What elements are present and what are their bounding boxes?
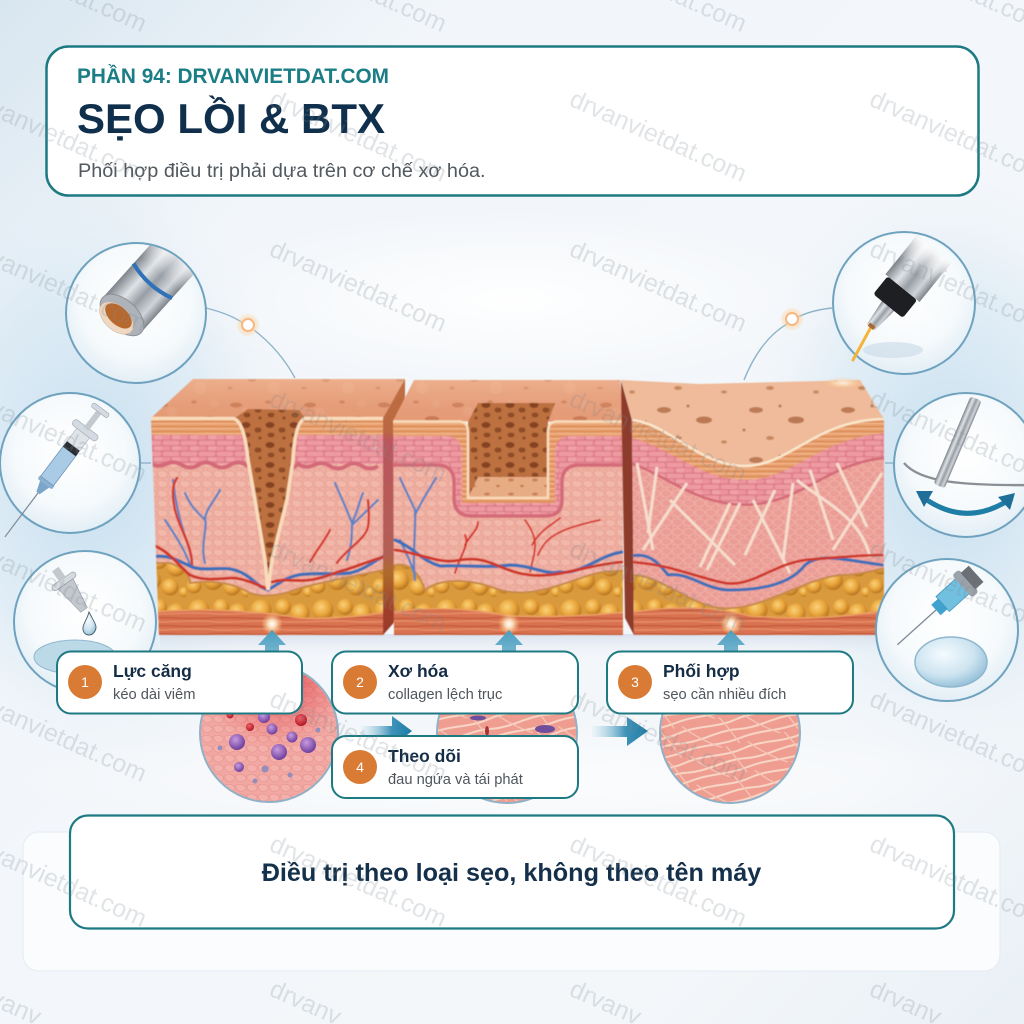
tool circle: microneedle handpiece	[66, 229, 206, 383]
scar edge highlight	[632, 419, 884, 466]
up arrow 3	[717, 613, 745, 652]
card 3: 3	[631, 674, 639, 690]
card 4: 4	[356, 759, 364, 775]
tool circle: syringe	[0, 393, 140, 546]
bottom pale panel	[23, 832, 1000, 971]
watermarks: drvanvietdat.com	[266, 830, 451, 933]
skin block 1: V-shaped scar	[150, 379, 405, 640]
flow arrow 2	[592, 717, 648, 746]
up arrow 1	[258, 613, 286, 652]
watermarks: drvanvietdat.com	[266, 85, 451, 188]
card 1: 1	[81, 674, 89, 690]
watermarks: drvanvietdat.com	[566, 685, 751, 788]
card 2: Xơ hóa	[388, 661, 448, 681]
card 1: kéo dài viêm	[113, 687, 195, 703]
right side face	[383, 379, 405, 635]
watermarks: drvanvietdat.com	[566, 385, 751, 488]
up arrow 2	[495, 613, 523, 652]
connector node left	[236, 313, 260, 337]
collagen fibers	[637, 463, 882, 573]
scar edges	[151, 418, 383, 590]
micro circle: inflammation	[200, 664, 340, 804]
watermarks: drvanvietdat.com	[266, 535, 451, 638]
header panel	[46, 46, 978, 196]
section label: PHẦN 94: DRVANVIETDAT.COM	[77, 65, 389, 88]
watermarks: drvanvietdat.com	[566, 85, 751, 188]
top face	[393, 380, 625, 422]
tool circle: laser pen	[833, 232, 975, 374]
connector node right	[780, 307, 804, 331]
card 4: Theo dõi	[388, 746, 461, 766]
card 2: collagen lệch trục	[388, 687, 502, 703]
front face layers	[150, 418, 395, 640]
watermarks: drvanvietdat.com	[266, 685, 451, 788]
tool circle: applicator and droplet	[14, 551, 156, 693]
watermarks: drvanvietdat.com	[566, 235, 751, 338]
notch wall	[233, 409, 305, 592]
card 2: 2	[356, 674, 364, 690]
front face layers	[632, 420, 885, 636]
blood vessels	[395, 478, 622, 580]
blood vessels	[153, 478, 390, 590]
micro circle: collagen network	[659, 714, 801, 804]
main title: SẸO LỒI & BTX	[77, 94, 385, 142]
watermarks: drvanvietdat.com	[566, 535, 751, 638]
front face layers	[392, 420, 625, 640]
tool circle: blue syringe and skin bubble	[876, 559, 1018, 701]
subtitle: Phối hợp điều trị phải dựa trên cơ chế xơ hóa.	[78, 160, 486, 182]
card 3: sẹo cần nhiều đích	[663, 687, 786, 703]
card 3: Phối hợp	[663, 661, 740, 681]
card 2	[332, 652, 578, 714]
notch interior	[468, 403, 555, 498]
epidermis band wrapping the notch	[392, 436, 623, 518]
card 4: đau ngứa và tái phát	[388, 772, 523, 788]
skin block 2: box-shaped scar	[392, 380, 625, 640]
skin block 3: rolling scar	[610, 380, 900, 640]
blood vessels	[632, 555, 882, 590]
scar front highlight	[393, 421, 623, 498]
conclusion box	[70, 816, 954, 928]
card 1: Lực căng	[113, 661, 192, 681]
card 4	[332, 736, 578, 798]
watermarks: drvanvietdat.com	[266, 385, 451, 488]
watermarks: drvanvietdat.com	[566, 830, 751, 933]
top face	[621, 380, 884, 466]
tool circle: cannula with sweep arrow	[894, 393, 1024, 537]
top face	[151, 379, 405, 418]
floor reflection	[160, 634, 885, 656]
flow arrow 1	[361, 716, 412, 747]
corneum band	[392, 421, 625, 503]
connector lines	[139, 308, 896, 463]
conclusion box: Điều trị theo loại sẹo, không theo tên máy	[262, 859, 761, 887]
card 3	[607, 652, 853, 714]
laser glow on block 3	[823, 377, 863, 389]
card 1	[57, 652, 302, 714]
left side face	[621, 380, 634, 635]
watermarks: drvanvietdat.com	[266, 235, 451, 338]
micro circle: fibrosis	[436, 710, 578, 804]
